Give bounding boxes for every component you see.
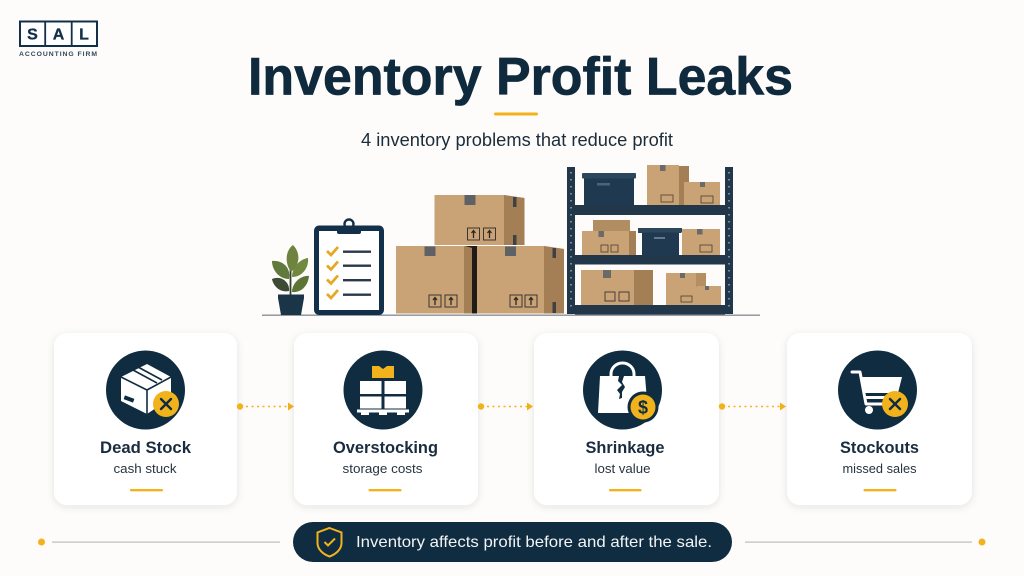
logo: SAL Accounting Firm [19, 22, 97, 58]
card accent line [130, 489, 163, 491]
logo: SAL Accounting Firm: A [53, 26, 65, 44]
card accent line [864, 489, 896, 491]
title: Inventory Profit Leaks [248, 48, 793, 106]
callout: key takeaway [293, 522, 732, 562]
card subtext: storage costs [342, 461, 423, 476]
icon: damaged box with x badge [106, 350, 185, 430]
arrow: Dead Stock to Overstocking [237, 402, 294, 410]
icon: potted plant [272, 245, 309, 315]
arrow: Overstocking to Shrinkage [478, 402, 533, 410]
card accent line [368, 489, 402, 491]
logo: SAL Accounting Firm: ACCOUNTING FIRM [19, 51, 97, 58]
bottom shelf items [581, 270, 721, 305]
card subtext: lost value [594, 461, 650, 476]
icon: clipboard checklist [314, 220, 384, 315]
card heading: Stockouts [840, 438, 919, 457]
subtitle: 4 inventory problems that reduce profit [361, 130, 673, 150]
icon: stacked cardboard boxes [396, 195, 564, 314]
card heading: Dead Stock [100, 438, 192, 457]
panel: Overstocking [294, 333, 478, 505]
panel: Stockouts [787, 333, 972, 505]
arrow: Shrinkage to Stockouts [719, 402, 786, 410]
icon: torn bag with dollar badge: $ [638, 398, 648, 418]
panel: Shrinkage [534, 333, 719, 505]
footer right rule with dot [745, 538, 986, 546]
callout text: Inventory affects profit before and after the sale. [356, 534, 712, 551]
icon: shield with check [318, 528, 342, 556]
title accent line [494, 112, 538, 116]
card accent line [609, 489, 642, 491]
card subtext: cash stuck [114, 461, 177, 476]
icon: pallet of stacked boxes [344, 350, 422, 430]
icon: torn bag with dollar badge [583, 350, 662, 430]
card heading: Shrinkage [586, 438, 664, 457]
icon: metal shelving with boxes [567, 165, 733, 314]
middle shelf items [582, 220, 720, 255]
shelf frame [567, 167, 575, 314]
icon: shopping cart with x badge [838, 350, 917, 430]
top shelf items [582, 165, 720, 205]
floor line [262, 314, 760, 316]
logo: SAL Accounting Firm: L [79, 26, 89, 44]
footer left rule with dot [38, 538, 280, 546]
panel: Dead Stock [54, 333, 237, 505]
illustration: warehouse scene [262, 165, 760, 316]
card subtext: missed sales [842, 461, 917, 476]
logo: SAL Accounting Firm: S [27, 26, 38, 44]
card heading: Overstocking [333, 438, 438, 457]
